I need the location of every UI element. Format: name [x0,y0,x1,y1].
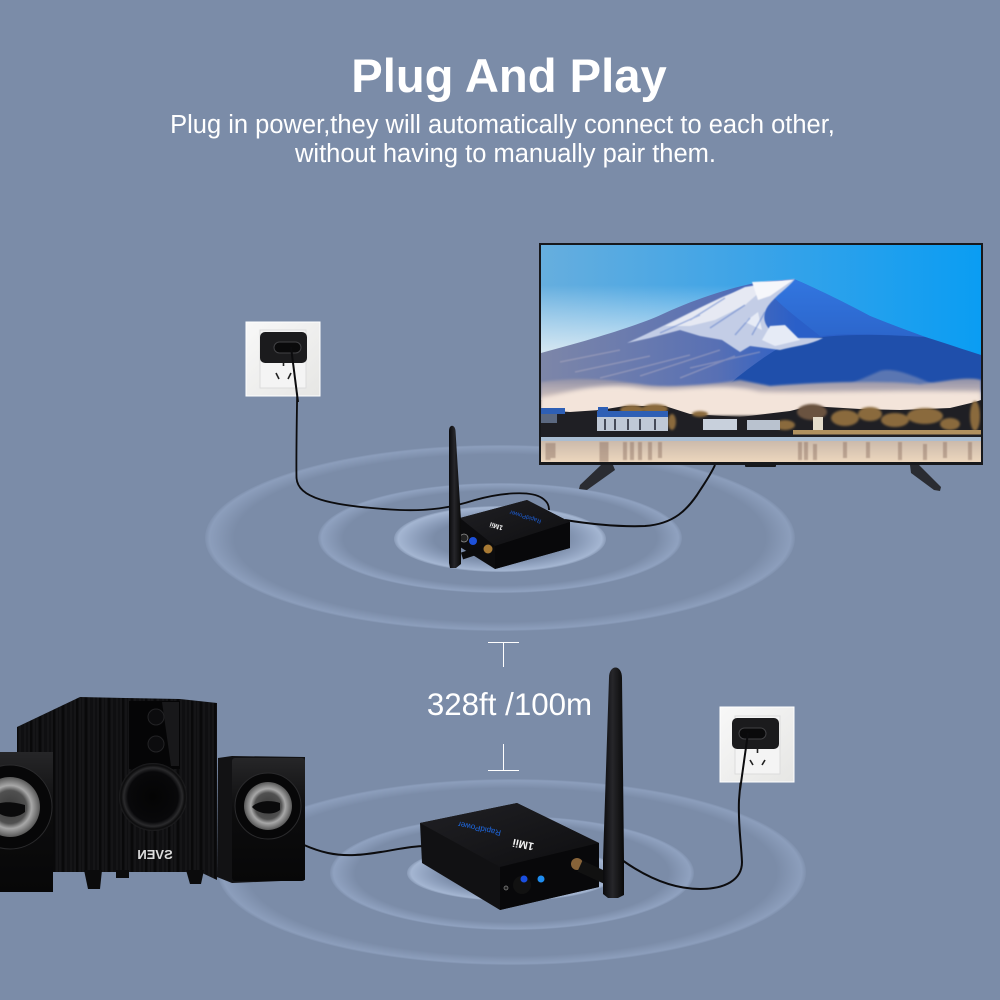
distance label: 328ft /100m [427,687,592,722]
cable: top power to transmitter [296,350,549,510]
receiver brand: RapidPower [457,819,502,837]
control panel [129,701,180,769]
wall outlet with plug: bottom [720,707,794,790]
lower slope streaks [560,350,760,378]
TV bezel [539,243,983,465]
TV screen: mountain landscape [541,245,981,462]
wall outlet with plug: top [246,322,320,402]
cable: speakers to receiver [304,845,425,855]
speakers [0,697,305,892]
subtitle: Plug in power,they will automatically connect to each other, [170,111,835,139]
snow field [627,279,823,352]
transmitter brand: RapidPower [509,508,542,524]
subtitle [170,111,835,168]
transmitter LED and connector [460,534,492,556]
subwoofer feet [84,870,204,889]
right flank [775,280,900,332]
lake reflection [541,441,981,462]
subwoofer [17,697,217,889]
receiver logo: 1Mii [512,836,535,852]
receiver body [420,803,599,910]
distance marker: top [488,642,519,667]
snow crevasses [660,298,765,335]
signal rings: transmitter [205,445,795,631]
distance marker: bottom [488,744,519,771]
mountain body [541,279,981,400]
TV stand feet [579,465,941,491]
signal rings: receiver [218,779,806,965]
transmitter logo: 1Mii [489,520,504,531]
receiver knob and LED [504,876,544,894]
transmitter antenna [449,426,461,568]
title: Plug And Play [351,50,667,103]
left speaker [0,752,53,892]
mist [541,379,981,415]
lower shadow [720,335,981,392]
television [539,243,983,491]
receiver antenna [603,668,624,898]
subtitle: without having to manually pair them. [294,140,716,168]
cable: receiver power [622,733,747,889]
receiver device [420,668,624,910]
right speaker [217,756,305,883]
cable: transmitter to TV [565,465,715,526]
receiver antenna connector [571,858,606,878]
brand: SVEN [137,847,173,862]
transmitter device [449,426,570,569]
lakeside buildings [597,417,668,431]
transmitter body [460,500,570,569]
distant ridge [850,370,935,385]
town and trees [541,400,981,437]
woofer [119,763,187,831]
